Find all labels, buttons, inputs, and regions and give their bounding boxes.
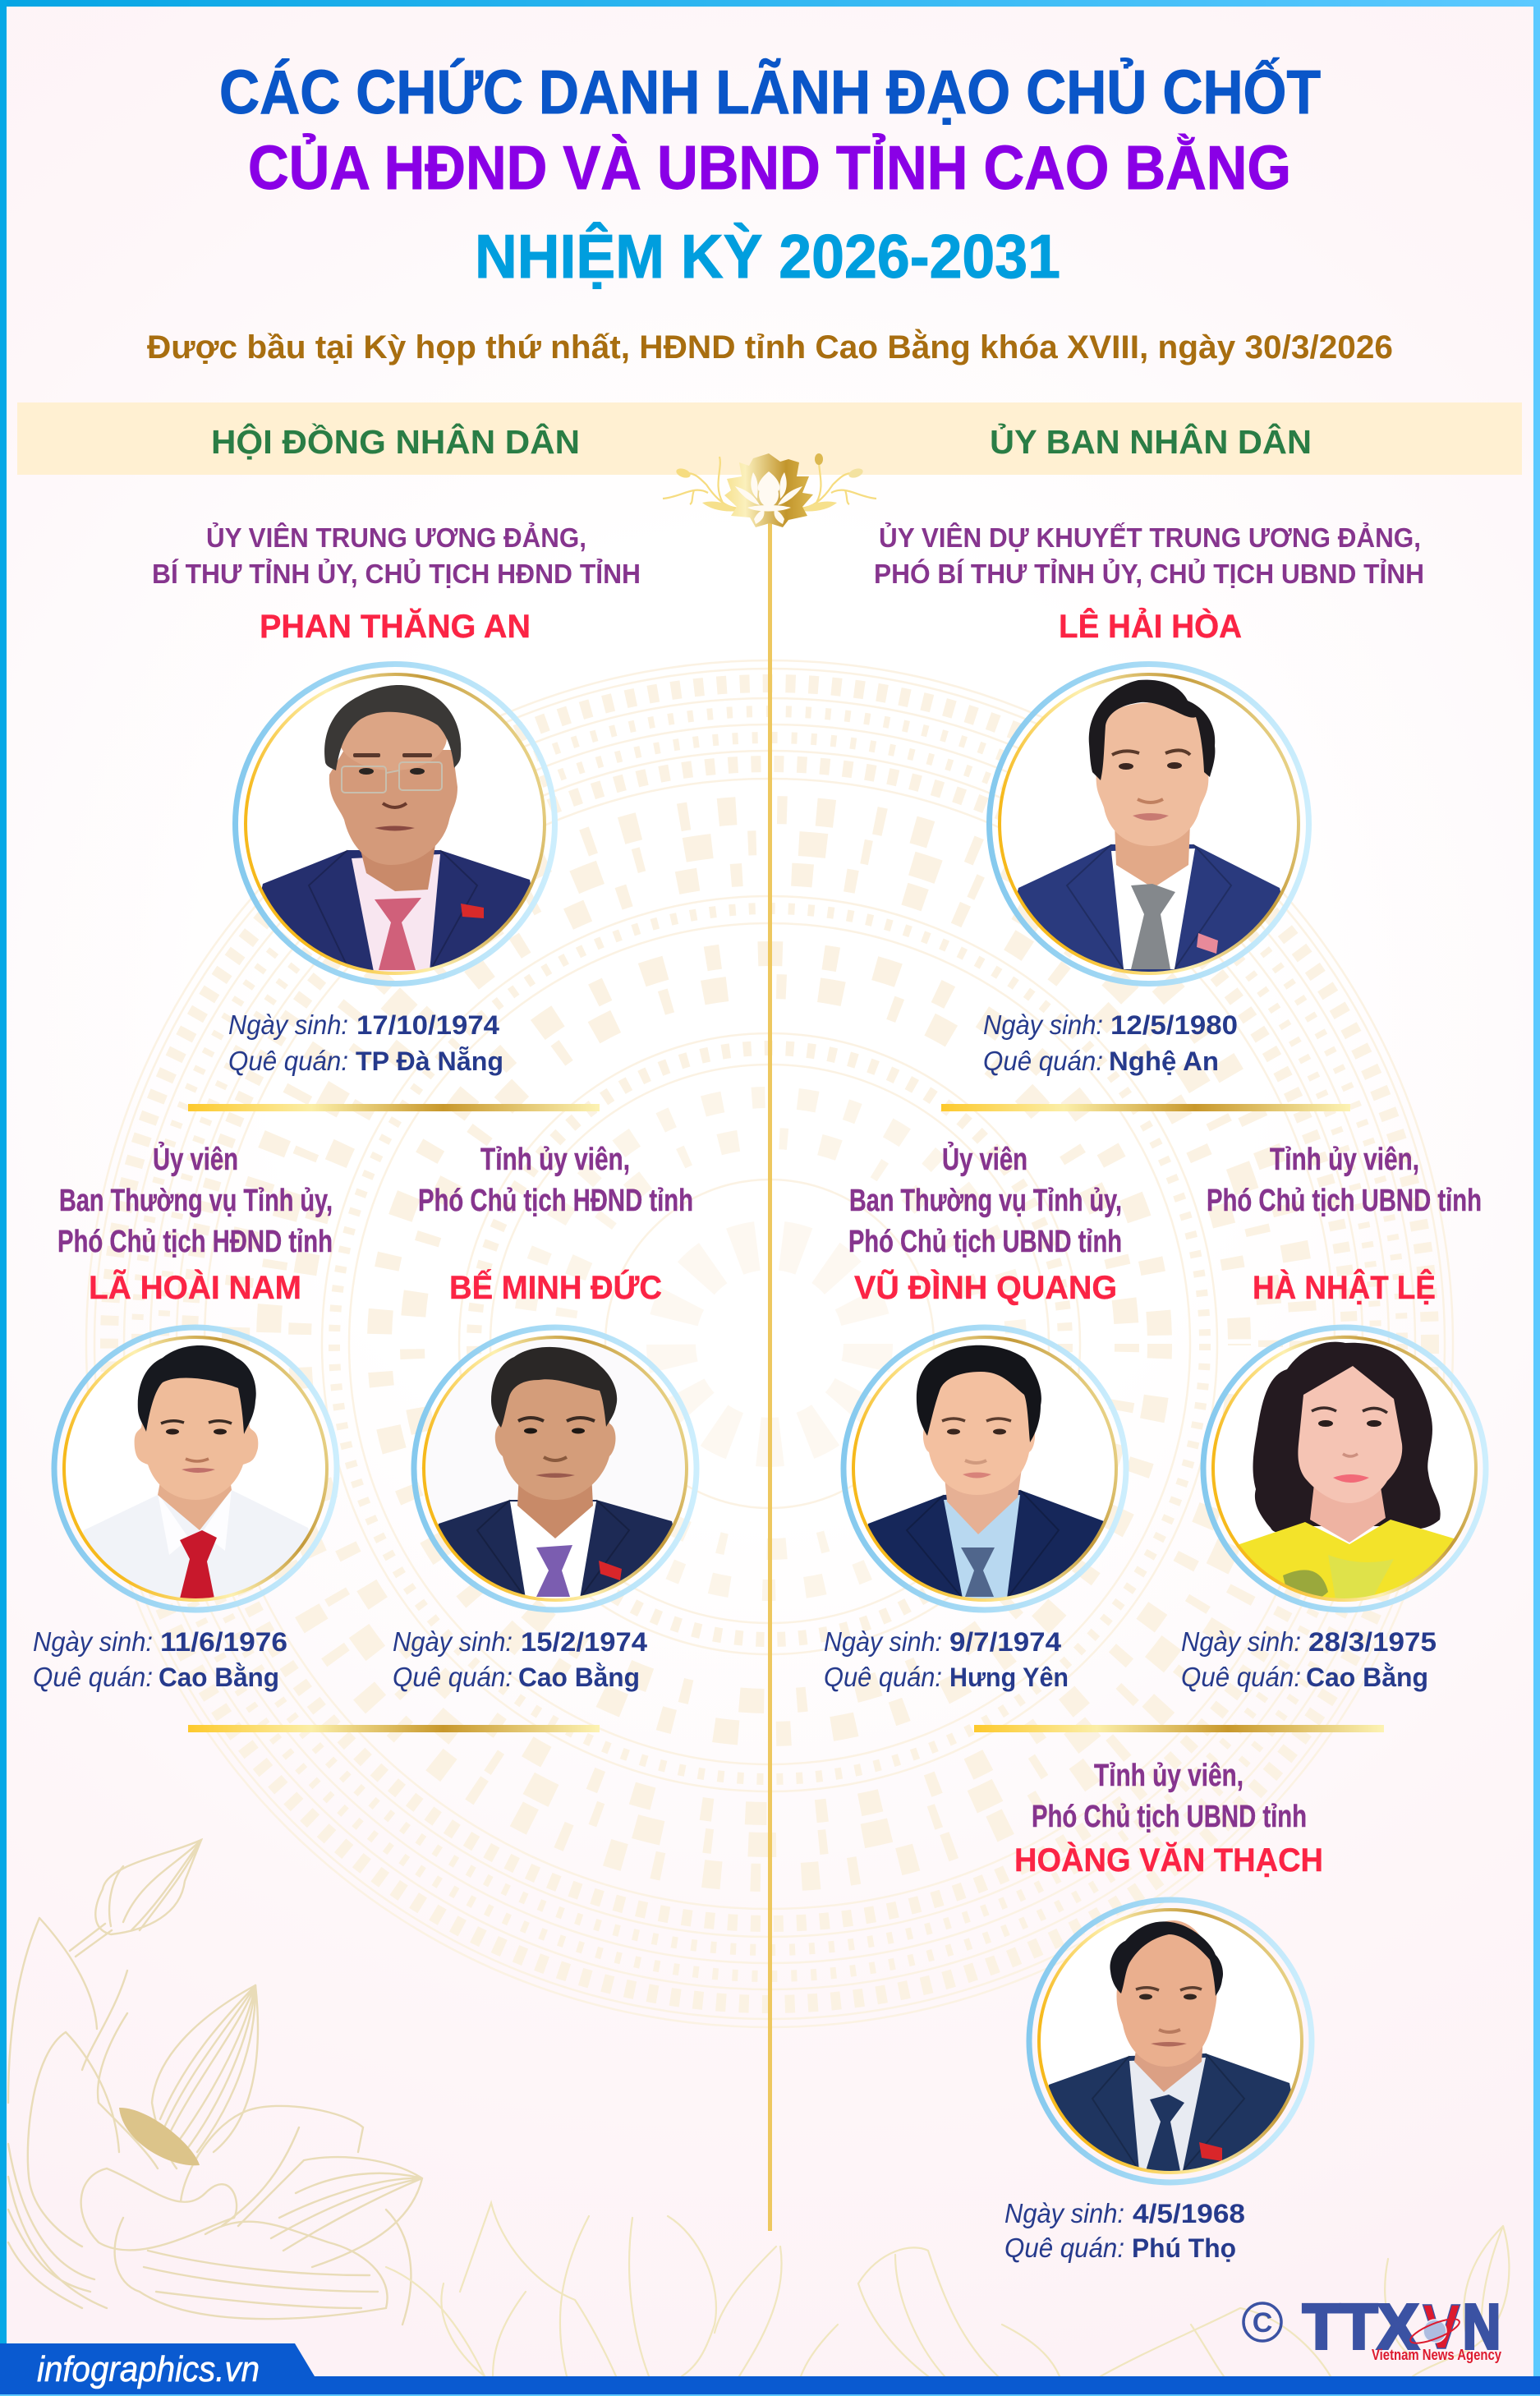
role text: PHÓ BÍ THƯ TỈNH ỦY, CHỦ TỊCH UBND TỈNH xyxy=(874,559,1424,589)
birth and hometown: Quê quán: xyxy=(33,1662,153,1692)
birth and hometown: Quê quán: xyxy=(1004,2233,1124,2263)
title xyxy=(219,57,1321,291)
name: LÃ HOÀI NAM xyxy=(89,1268,301,1306)
role text xyxy=(152,522,641,589)
portrait xyxy=(54,1327,337,1616)
birth and hometown: Ngày sinh: xyxy=(1004,2198,1124,2228)
birth and hometown: 4/5/1968 xyxy=(1133,2199,1245,2228)
panel: Hà Nhật Lệ xyxy=(1181,1143,1486,1692)
birth and hometown: Quê quán: xyxy=(393,1662,513,1692)
birth and hometown: 28/3/1975 xyxy=(1308,1627,1437,1657)
birth and hometown: Ngày sinh: xyxy=(228,1009,348,1040)
section header band: ỦY BAN NHÂN DÂN xyxy=(990,423,1312,461)
subtitle: Được bầu tại Kỳ họp thứ nhất, HĐND tỉnh Cao Bằng khóa XVIII, ngày 30/3/2026 xyxy=(147,328,1393,366)
role text: Ban Thường vụ Tỉnh ủy, xyxy=(59,1184,333,1218)
role text: Ủy viên xyxy=(153,1141,238,1177)
birth and hometown: Quê quán: xyxy=(983,1046,1103,1076)
role text: Phó Chủ tịch HĐND tỉnh xyxy=(57,1225,333,1259)
role text: Ủy viên xyxy=(942,1141,1027,1177)
name: HOÀNG VĂN THẠCH xyxy=(1014,1842,1323,1879)
birth and hometown: 15/2/1974 xyxy=(521,1627,647,1657)
role text xyxy=(874,522,1424,589)
role text xyxy=(1032,1759,1307,1834)
role text: Tỉnh ủy viên, xyxy=(1094,1759,1243,1793)
birth and hometown: 11/6/1976 xyxy=(160,1627,287,1657)
role text xyxy=(848,1141,1122,1259)
section header band xyxy=(17,402,1522,475)
birth and hometown: 9/7/1974 xyxy=(949,1627,1061,1657)
name: HÀ NHẬT LỆ xyxy=(1253,1268,1436,1306)
name: VŨ ĐÌNH QUANG xyxy=(854,1268,1117,1306)
logo: TTXVN: N xyxy=(1463,2292,1501,2362)
portrait xyxy=(235,664,555,988)
title: NHIỆM KỲ 2026-2031 xyxy=(475,222,1060,291)
birth and hometown: Ngày sinh: xyxy=(824,1626,942,1657)
role text: ỦY VIÊN DỰ KHUYẾT TRUNG ƯƠNG ĐẢNG, xyxy=(879,522,1421,553)
birth and hometown: Phú Thọ xyxy=(1132,2233,1236,2263)
birth and hometown: Cao Bằng xyxy=(159,1662,279,1692)
birth and hometown: 17/10/1974 xyxy=(356,1010,499,1040)
birth and hometown: TP Đà Nẵng xyxy=(356,1046,503,1076)
name: LÊ HẢI HÒA xyxy=(1059,607,1242,645)
role text: BÍ THƯ TỈNH ỦY, CHỦ TỊCH HĐND TỈNH xyxy=(152,559,641,589)
role text: Phó Chủ tịch HĐND tỉnh xyxy=(418,1184,693,1218)
role text: Phó Chủ tịch UBND tỉnh xyxy=(1032,1800,1307,1834)
logo: TTXVN: TTX xyxy=(1303,2292,1418,2362)
birth and hometown: Quê quán: xyxy=(824,1662,942,1692)
title: CÁC CHỨC DANH LÃNH ĐẠO CHỦ CHỐT xyxy=(219,57,1321,126)
panel: Bế Minh Đức xyxy=(393,1143,696,1692)
panel: Phan Thăng An xyxy=(152,522,641,1076)
role text: Phó Chủ tịch UBND tỉnh xyxy=(848,1225,1122,1259)
footer bar: infographics.vn xyxy=(37,2349,260,2389)
birth and hometown: Ngày sinh: xyxy=(1181,1626,1301,1657)
portrait xyxy=(1029,1900,1312,2189)
birth and hometown: Quê quán: xyxy=(228,1046,348,1076)
birth and hometown xyxy=(393,1626,647,1692)
role text xyxy=(418,1143,693,1218)
footer bar xyxy=(0,2343,1540,2396)
role text: Ban Thường vụ Tỉnh ủy, xyxy=(849,1184,1122,1218)
portrait xyxy=(1203,1327,1486,1616)
panel: Lê Hải Hòa xyxy=(874,522,1424,1076)
divider bars xyxy=(188,1104,1384,1732)
birth and hometown: Quê quán: xyxy=(1181,1662,1301,1692)
logo: TTXVN: Vietnam News Agency xyxy=(1372,2347,1501,2363)
role text: Tỉnh ủy viên, xyxy=(1270,1143,1419,1177)
birth and hometown xyxy=(824,1626,1069,1692)
birth and hometown: Ngày sinh: xyxy=(393,1626,513,1657)
logo: TTXVN: V xyxy=(1423,2292,1460,2362)
portrait xyxy=(989,664,1309,988)
role text: ỦY VIÊN TRUNG ƯƠNG ĐẢNG, xyxy=(206,522,586,553)
role text: Tỉnh ủy viên, xyxy=(480,1143,630,1177)
center divider line xyxy=(768,522,772,2231)
name: PHAN THĂNG AN xyxy=(260,608,531,645)
logo: TTXVN xyxy=(1243,2292,1501,2363)
birth and hometown: Cao Bằng xyxy=(518,1662,640,1692)
panel: Vũ Đình Quang xyxy=(824,1141,1126,1692)
background: lotus line art xyxy=(8,1840,422,2325)
portrait xyxy=(844,1327,1126,1616)
birth and hometown: 12/5/1980 xyxy=(1110,1010,1238,1040)
panel: Lã Hoài Nam xyxy=(33,1141,337,1692)
name: BẾ MINH ĐỨC xyxy=(449,1268,662,1306)
portrait xyxy=(414,1327,696,1616)
section header band: HỘI ĐỒNG NHÂN DÂN xyxy=(211,423,580,461)
birth and hometown: Ngày sinh: xyxy=(983,1009,1103,1040)
birth and hometown xyxy=(983,1009,1238,1076)
birth and hometown xyxy=(228,1009,503,1076)
panel: Hoàng Văn Thạch xyxy=(1004,1759,1323,2263)
birth and hometown: Nghệ An xyxy=(1109,1046,1219,1076)
background: lotus gold leaf xyxy=(119,2108,200,2165)
role text xyxy=(57,1141,333,1259)
title: CỦA HĐND VÀ UBND TỈNH CAO BẰNG xyxy=(248,133,1291,202)
logo: TTXVN: C xyxy=(1253,2307,1272,2339)
birth and hometown: Ngày sinh: xyxy=(33,1626,153,1657)
birth and hometown: Hưng Yên xyxy=(949,1662,1069,1692)
birth and hometown: Cao Bằng xyxy=(1306,1662,1428,1692)
role text xyxy=(1207,1143,1482,1218)
icon: golden lotus xyxy=(663,453,876,527)
birth and hometown xyxy=(1181,1626,1437,1692)
birth and hometown xyxy=(33,1626,287,1692)
birth and hometown xyxy=(1004,2198,1245,2263)
background: bronze drum pattern xyxy=(86,660,1453,2027)
